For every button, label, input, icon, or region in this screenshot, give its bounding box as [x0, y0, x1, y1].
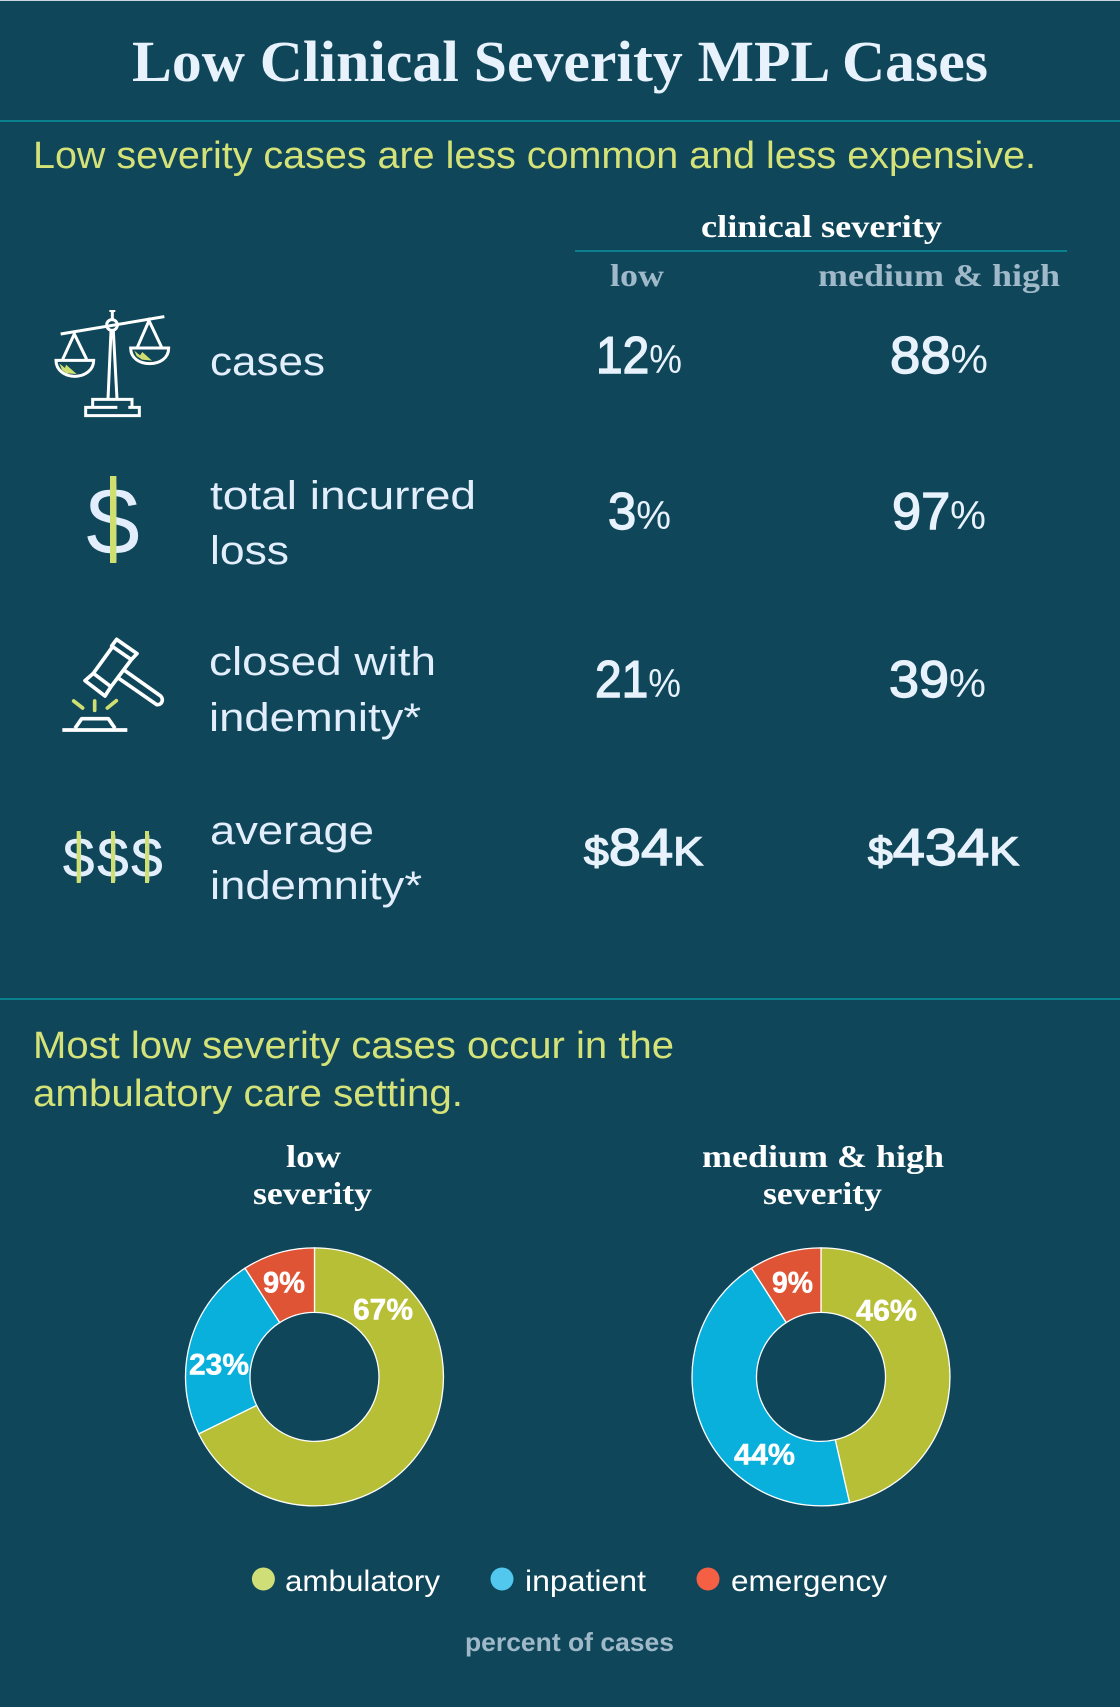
icon: scales — [56, 311, 169, 416]
value: low total incurred loss: 3% — [608, 483, 671, 541]
row label: average indemnity: indemnity* — [210, 864, 422, 908]
chart heading: low severity: severity — [253, 1175, 372, 1211]
row label: cases: cases — [210, 340, 325, 384]
icon: three dollars — [63, 826, 163, 889]
value: medium and high total incurred loss: 97% — [892, 483, 986, 541]
row label: total incurred loss: total incurred — [210, 474, 476, 518]
table header — [610, 208, 1060, 293]
icon: three dollars: $ — [63, 826, 94, 889]
subheading: less common and less expensive: Low severity cases are less common and less expensive. — [33, 135, 1036, 177]
legend: inpatient — [525, 1565, 647, 1598]
value: medium and high cases: 88% — [890, 327, 988, 385]
donut chart: low severity: 9% — [263, 1266, 305, 1299]
row label: total incurred loss: loss — [210, 529, 289, 573]
donut chart: medium and high severity: 46% — [856, 1294, 917, 1327]
donut chart: medium and high severity — [692, 1248, 950, 1506]
donut chart: low severity: 67% — [353, 1293, 413, 1326]
value: low average indemnity: $84K — [584, 819, 703, 877]
value: medium and high closed with indemnity: 39% — [889, 651, 986, 709]
icon: gavel — [62, 639, 162, 730]
chart heading: low severity — [253, 1138, 372, 1211]
value: low cases: 12% — [596, 327, 682, 385]
subheading: ambulatory care setting: ambulatory care setting. — [33, 1073, 463, 1115]
donut chart: low severity: 23% — [189, 1348, 249, 1381]
caption: percent of cases: percent of cases — [465, 1627, 674, 1657]
row label: average indemnity: average — [210, 809, 374, 853]
donut chart: medium and high severity: 9% — [772, 1266, 813, 1299]
icon: dollar: $ — [86, 468, 140, 575]
value: medium and high average indemnity: $434K — [868, 819, 1019, 877]
row label: closed with indemnity: indemnity* — [209, 696, 421, 740]
legend: emergency — [731, 1565, 887, 1598]
chart heading: medium and high severity: severity — [763, 1175, 882, 1211]
chart heading: low severity: low — [286, 1138, 341, 1174]
row label: closed with indemnity — [209, 640, 436, 740]
row label: total incurred loss — [210, 474, 476, 573]
legend — [252, 1565, 887, 1598]
title: Low Clinical Severity MPL Cases — [132, 29, 988, 94]
row label: average indemnity — [210, 809, 422, 908]
donut chart: medium and high severity: 44% — [734, 1438, 795, 1471]
table header: medium & high — [818, 257, 1060, 293]
icon: three dollars: $ — [97, 826, 129, 889]
table header: low — [610, 257, 664, 293]
chart heading: medium and high severity — [702, 1138, 944, 1211]
legend: ambulatory — [285, 1565, 440, 1598]
table header: clinical severity — [701, 208, 942, 244]
icon: three dollars: $ — [131, 826, 163, 889]
value: low closed with indemnity: 21% — [595, 651, 681, 709]
chart heading: medium and high severity: medium & high — [702, 1138, 944, 1174]
donut chart: low severity — [185, 1248, 443, 1506]
row label: closed with indemnity: closed with — [209, 640, 436, 684]
subheading: ambulatory care setting: Most low severity cases occur in the — [33, 1025, 674, 1067]
subheading: ambulatory care setting — [33, 1025, 674, 1115]
